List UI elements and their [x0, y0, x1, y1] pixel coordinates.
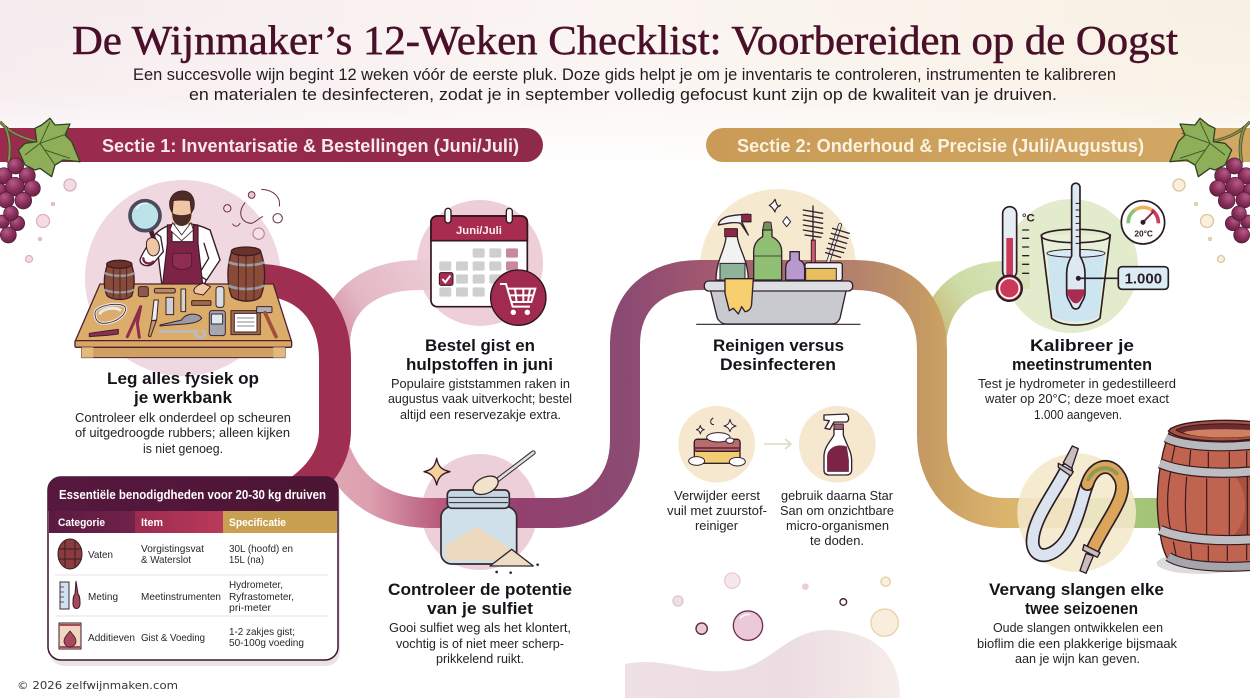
illustration: cleaning basin [697, 199, 860, 324]
step 6 text: Oude slangen ontwikkelen een [993, 621, 1163, 635]
step 5 text: 1.000 aangeven. [1034, 408, 1122, 422]
step 4 heading: Desinfecteren [720, 355, 836, 374]
flow ribbon: branch to calendar [335, 275, 450, 345]
large barrel [228, 247, 265, 301]
table title [48, 477, 338, 511]
row: Vaten: Vaten [88, 549, 113, 561]
row: Meting: Meetinstrumenten [141, 591, 221, 603]
caption: clean: Verwijder eerst [674, 489, 761, 503]
caption: sanitize: gebruik daarna Star [781, 489, 893, 503]
flow ribbon: first dark segment [258, 280, 335, 492]
step 5 text: Kalibreer je [1030, 336, 1134, 355]
left bubbles [26, 179, 76, 262]
step 3 text: vochtig is of niet meer scherp- [396, 637, 564, 651]
row: Vaten: & Waterslot [141, 554, 191, 566]
intro text: en materialen te desinfecteren, zodat je in september volledig gefocust kunt zijn op de kwaliteit van je druiven. [189, 86, 1057, 104]
caption: clean: vuil met zuurstof- [667, 504, 767, 518]
row: Meting: Hydrometer, [229, 579, 283, 591]
illustration: calendar with shopping cart [431, 208, 546, 325]
row: Additieven: 1-2 zakjes gist; [229, 626, 295, 638]
row: Meting: pri-meter [229, 602, 271, 614]
temperature gauge [1121, 201, 1165, 244]
illustration: sulfite jar with spoon [424, 453, 539, 574]
right bubbles [1173, 179, 1224, 262]
reading label [1118, 267, 1168, 289]
hand on bench [194, 283, 211, 295]
glass of water [1041, 229, 1110, 325]
row: Additieven: Additieven [88, 632, 135, 644]
illustration: winemaker at workbench [75, 189, 292, 358]
flow ribbon: main path across steps [336, 275, 1170, 513]
table column headers: Item [141, 517, 163, 529]
thermometer [997, 207, 1035, 301]
caption: clean [667, 489, 767, 533]
step 4 heading: Reinigen versus [713, 336, 844, 355]
stained hose [1087, 467, 1122, 549]
step 3 text: prikkelend ruikt. [436, 652, 524, 666]
clean hose [1033, 470, 1087, 555]
row: Vaten: 15L (na) [229, 554, 264, 566]
step 4 heading [713, 336, 844, 374]
step 5 text: meetinstrumenten [1012, 355, 1152, 374]
row: Meting: Ryfrastometer, [229, 591, 294, 603]
hose connectors [1058, 446, 1100, 573]
caption: sanitize: San om onzichtbare [780, 504, 894, 518]
step 3 text: van je sulfiet [427, 599, 533, 618]
panel: clean then sanitize [667, 406, 894, 548]
step 2 text: augustus vaak uitverkocht; bestel [388, 392, 572, 406]
winemaker figure [130, 191, 220, 284]
step 2 text: Populaire giststammen raken in [391, 377, 570, 391]
step 5 text: water op 20°C; deze moet exact [984, 392, 1170, 406]
row: Additieven: Gist & Voeding [141, 632, 205, 644]
flow ribbon: branch to thermometer [932, 275, 1030, 350]
panel: supplies table [48, 477, 340, 666]
caption: sanitize: te doden. [810, 534, 864, 548]
intro text: Een succesvolle wijn begint 12 weken vóór de eerste pluk. Doze gids helpt je om je inventaris te controleren, instrumenten te kalibreren [133, 66, 1116, 84]
caption: sanitize [780, 489, 894, 548]
step 1 text [75, 369, 291, 456]
step 1 text: of uitgedroogde rubbers; alleen kijken [75, 426, 290, 440]
decorative wave at the bottom [625, 630, 900, 698]
step 3 text: Controleer de potentie [388, 580, 572, 599]
right grape vine [1170, 118, 1250, 243]
step backdrop circles [85, 180, 1138, 570]
section 2 banner: Sectie 2: Onderhoud & Precisie (Juli/Augustus) [737, 136, 1144, 156]
illustration: calendar with shopping cart: Juni/Juli [456, 225, 502, 237]
illustration: thermometer, hydrometer glass and gauge [997, 183, 1168, 325]
row: Vaten: 30L (hoofd) en [229, 543, 293, 555]
step 2 text: Bestel gist en [425, 336, 535, 355]
small barrel [104, 260, 134, 299]
hydrometer [1067, 183, 1119, 309]
row: Vaten [58, 539, 293, 569]
reading label: 1.000 [1125, 270, 1162, 287]
icon: soapy sponge [678, 406, 755, 483]
section 1 banner [0, 128, 543, 162]
step 1 text: je werkbank [133, 388, 233, 407]
arrow [764, 439, 791, 449]
temperature gauge: 20°C [1134, 229, 1153, 239]
section 1 banner: Sectie 1: Inventarisatie & Bestellingen (Juni/Juli) [102, 136, 519, 156]
icon: spray bottle [799, 406, 876, 483]
table column headers [49, 511, 337, 533]
title: De Wijnmaker’s 12-Weken Checklist: Voorbereiden op de Oogst [72, 17, 1179, 63]
workbench [75, 284, 292, 358]
step 5 text [978, 336, 1176, 422]
row: Additieven [59, 623, 304, 649]
step 1 text: Leg alles fysiek op [107, 369, 259, 388]
section 2 banner [706, 128, 1250, 162]
intro text [133, 66, 1116, 104]
thermometer: °C [1022, 213, 1035, 225]
step 2 text: altijd een reservezakje extra. [400, 408, 561, 422]
row: Meting: Meting [88, 591, 118, 603]
step 3 text [388, 580, 572, 666]
table column headers: Categorie [58, 517, 105, 529]
step 3 text: Gooi sulfiet weg als het klontert, [389, 621, 571, 635]
step 2 text [388, 336, 572, 422]
caption: clean: reiniger [695, 519, 738, 533]
step 6 text: twee seizoenen [1025, 599, 1138, 618]
table title: Essentiële benodigdheden voor 20-30 kg druiven [59, 488, 326, 502]
step 1 text: is niet genoeg. [143, 442, 223, 456]
footer copyright: © 2026 zelfwijnmaken.com [17, 679, 178, 692]
small bubbles by winemaker [224, 189, 282, 239]
illustration: old and new hoses [1017, 446, 1136, 573]
caption: sanitize: micro-organismen [786, 519, 889, 533]
step 6 text: Vervang slangen elke [989, 580, 1164, 599]
step 1 text: Controleer elk onderdeel op scheuren [75, 411, 291, 425]
illustration: wine barrel [1157, 420, 1250, 574]
step 5 text: Test je hydrometer in gedestilleerd [978, 377, 1176, 391]
table column headers: Specificatie [229, 517, 286, 529]
row: Vaten: Vorgistingsvat [141, 543, 204, 555]
decorative bubbles [673, 573, 898, 640]
row: Additieven: 50-100g voeding [229, 637, 304, 649]
step 6 text: bioflim die een plakkerige bijsmaak [977, 637, 1178, 651]
row: Meting [60, 579, 294, 614]
tools on the bench [89, 287, 276, 338]
left grape vine [0, 118, 80, 243]
step 6 text: aan je wijn kan geven. [1015, 652, 1140, 666]
step 2 text: hulpstoffen in juni [406, 355, 553, 374]
step 6 text [977, 580, 1178, 666]
